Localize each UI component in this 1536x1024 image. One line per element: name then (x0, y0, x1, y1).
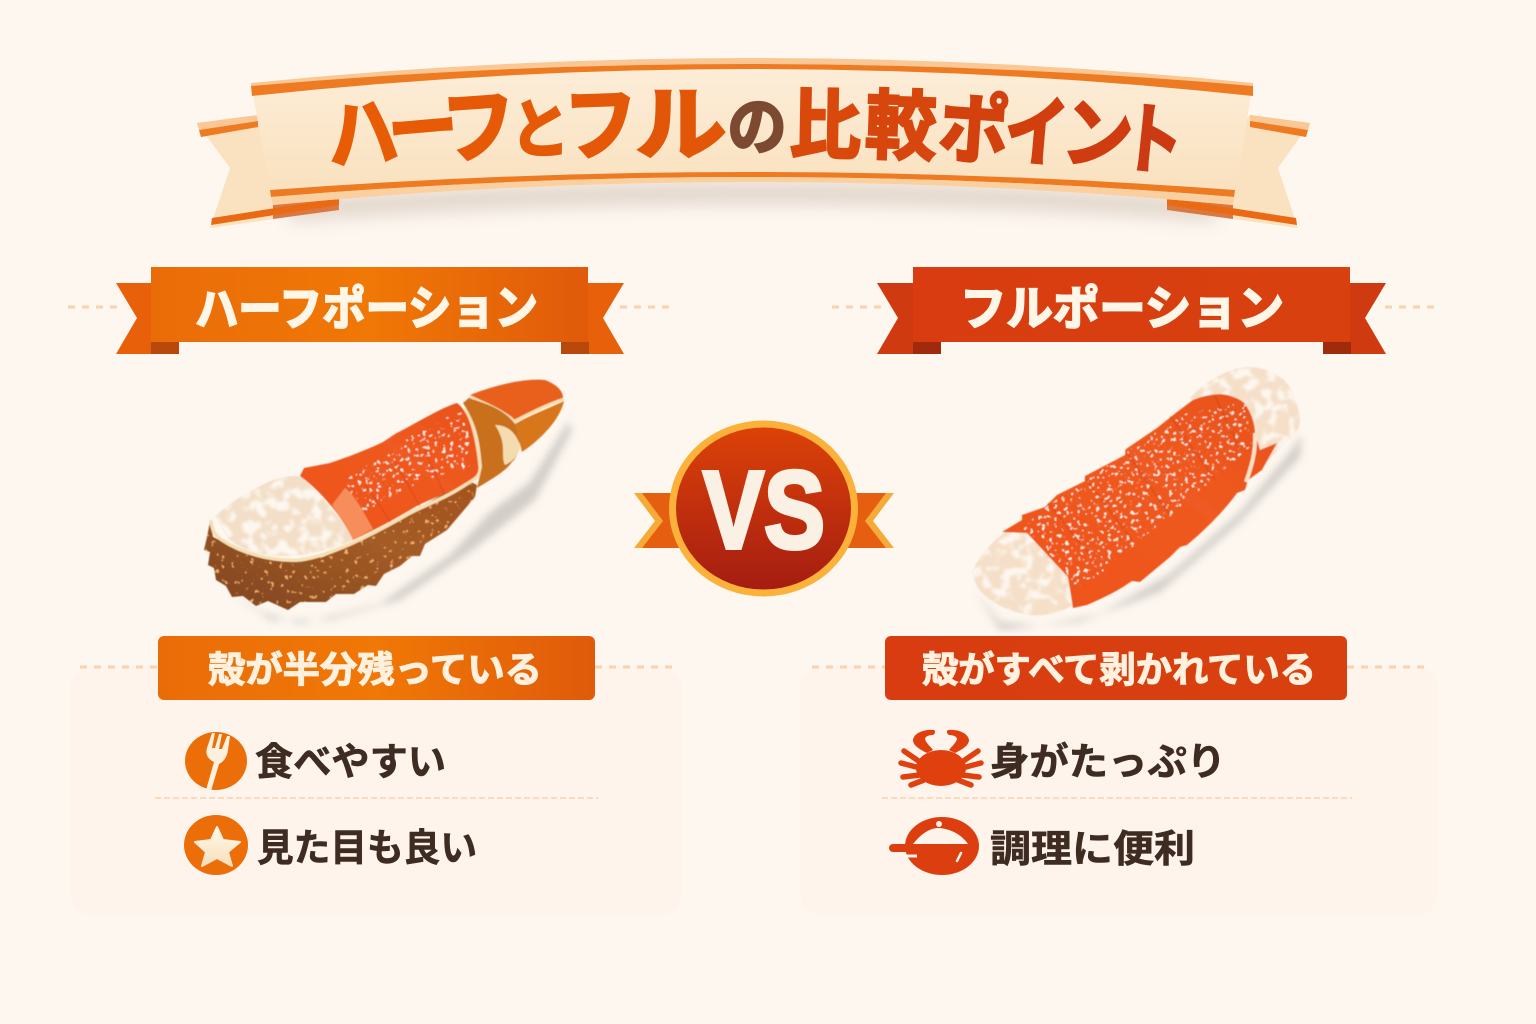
tag: half shell remains (158, 636, 595, 700)
heading: full portion: フルポーション (960, 282, 1284, 335)
claw lower pincer (515, 401, 564, 452)
tag: fully peeled shell (885, 636, 1347, 700)
title text: イ (1001, 86, 1071, 178)
speckles on shell (1020, 402, 1252, 590)
left badge ribbon (634, 493, 680, 548)
title text (324, 80, 1187, 187)
text: plenty of meat: 身がたっぷり (990, 742, 1226, 784)
title text: の (727, 92, 787, 162)
exposed white meat (215, 476, 353, 556)
cast shadow (222, 422, 572, 624)
heading: half portion: ハーフポーション (195, 281, 538, 336)
text: looks good: 見た目も良い (257, 828, 477, 870)
brown half shell with spikes (204, 480, 477, 610)
right ribbon tail (1167, 115, 1310, 228)
title text: ル (635, 81, 727, 171)
title text: ト (1119, 95, 1187, 187)
title text: ー (385, 87, 461, 171)
title text: 較 (864, 83, 938, 171)
claw upper pincer (470, 380, 563, 420)
right badge ribbon (848, 493, 894, 548)
panel: half portion details (70, 636, 682, 915)
orange shell body with spikes (1002, 394, 1277, 608)
title text: フ (439, 81, 519, 175)
meat at bottom end (972, 530, 1072, 615)
claw joint (463, 397, 520, 488)
meat at top end (1190, 367, 1300, 470)
panel: full portion details (800, 636, 1438, 915)
tag: half shell remains: 殻が半分残っている (208, 649, 542, 690)
speckles on orange meat (345, 412, 470, 515)
orange meat top (300, 403, 482, 540)
title text: ポ (936, 85, 1012, 176)
ribbon shadow (290, 182, 1215, 220)
cast shadow (975, 434, 1302, 630)
text: easy to eat: 食べやすい (255, 742, 446, 784)
cream shell rim (211, 408, 480, 560)
text: convenient for cooking: 調理に便利 (990, 829, 1195, 871)
left ribbon tail (197, 115, 339, 228)
icon: fork (185, 732, 247, 791)
VS text: VS (703, 449, 825, 572)
title text: と (510, 95, 570, 167)
title text: ハ (324, 87, 401, 182)
crab leg: half portion (204, 380, 572, 624)
main ribbon band (251, 58, 1253, 205)
icon: crab (901, 730, 981, 786)
title ribbon banner (197, 58, 1310, 228)
title text: 比 (789, 83, 862, 169)
title text: ン (1058, 89, 1137, 182)
left section header ribbon (68, 267, 672, 354)
tag: fully peeled shell: 殻がすべて剥かれている (922, 649, 1316, 690)
VS badge (634, 420, 894, 596)
icon: pan with lid (889, 817, 979, 875)
title text: フ (563, 80, 639, 172)
icon: star (184, 815, 248, 875)
crab leg: full portion (972, 367, 1302, 630)
right section header ribbon (832, 267, 1437, 354)
